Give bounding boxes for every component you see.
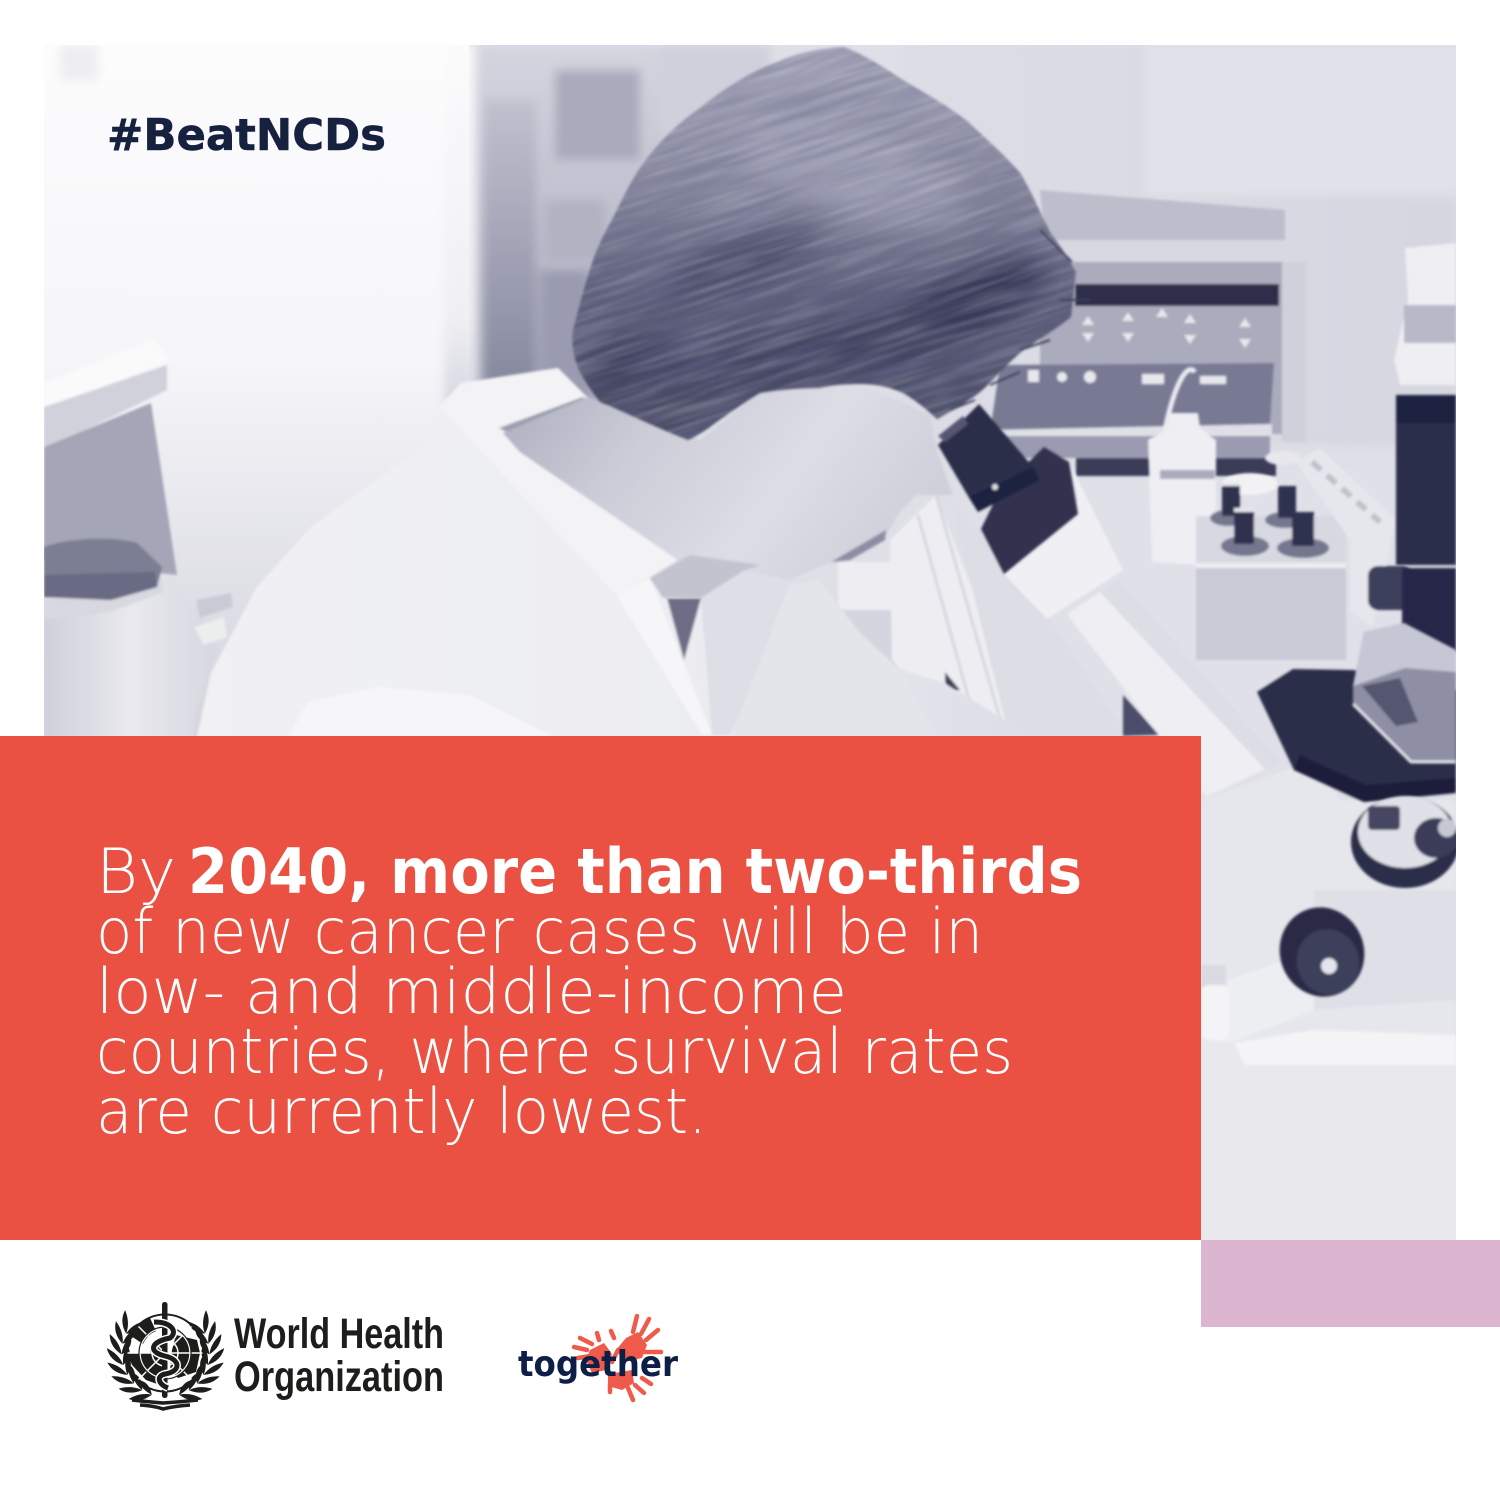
- foreground microscope: objectives turret: [1351, 796, 1459, 888]
- icon: red hand prints: [574, 1316, 661, 1400]
- lab instrument on the bench: [985, 190, 1306, 476]
- foreground microscope: clear specimen box: [1353, 623, 1456, 762]
- bench rails under the face: [838, 498, 1004, 718]
- scientist: lab coat: [196, 368, 1037, 740]
- hashtag: #BeatNCDs: [107, 110, 386, 161]
- emblem ribbon: [132, 1400, 198, 1409]
- left storage container: [44, 539, 233, 740]
- left shelf and recess: [44, 340, 177, 575]
- emblem globe: [126, 1314, 204, 1392]
- logo wordmark: World Health: [234, 1310, 444, 1358]
- logo: together: [518, 1316, 678, 1400]
- logo wordmark: Organization: [234, 1353, 444, 1401]
- emblem staff and serpent: [154, 1302, 177, 1398]
- scientist: face and neck: [503, 384, 953, 598]
- logo wordmark: together: [518, 1344, 678, 1385]
- statistic text: [96, 835, 1082, 1148]
- pink accent block: [1201, 1240, 1500, 1327]
- scientist: hair: [571, 46, 1088, 442]
- logo wordmark: [234, 1310, 444, 1401]
- statistic text: of new cancer cases will be in: [96, 895, 983, 968]
- foreground microscope: focus knob: [1278, 905, 1366, 999]
- icon: WHO emblem: [107, 1302, 224, 1409]
- panel: red message box: [0, 736, 1201, 1240]
- foreground microscope: black column and top housing: [1394, 243, 1456, 652]
- photo background: laboratory room: [44, 45, 1456, 1240]
- foreground microscope: dark stage: [1257, 669, 1456, 802]
- foreground microscope: eyepiece: [938, 404, 1078, 574]
- statistic text: are currently lowest.: [96, 1075, 707, 1148]
- logo: World Health Organization: [107, 1302, 444, 1409]
- bench bottle and reagent block: [1148, 370, 1412, 660]
- foreground microscope: body and base: [1004, 462, 1456, 1065]
- photo: scientist looking into a microscope: [44, 0, 1459, 1240]
- emblem laurel wreath: [107, 1310, 224, 1407]
- statistic text: countries, where survival rates: [96, 1015, 1013, 1088]
- statistic text: 2040, more than two-thirds: [188, 835, 1082, 908]
- statistic text: low- and middle-income: [96, 955, 847, 1028]
- statistic text: By: [96, 835, 176, 908]
